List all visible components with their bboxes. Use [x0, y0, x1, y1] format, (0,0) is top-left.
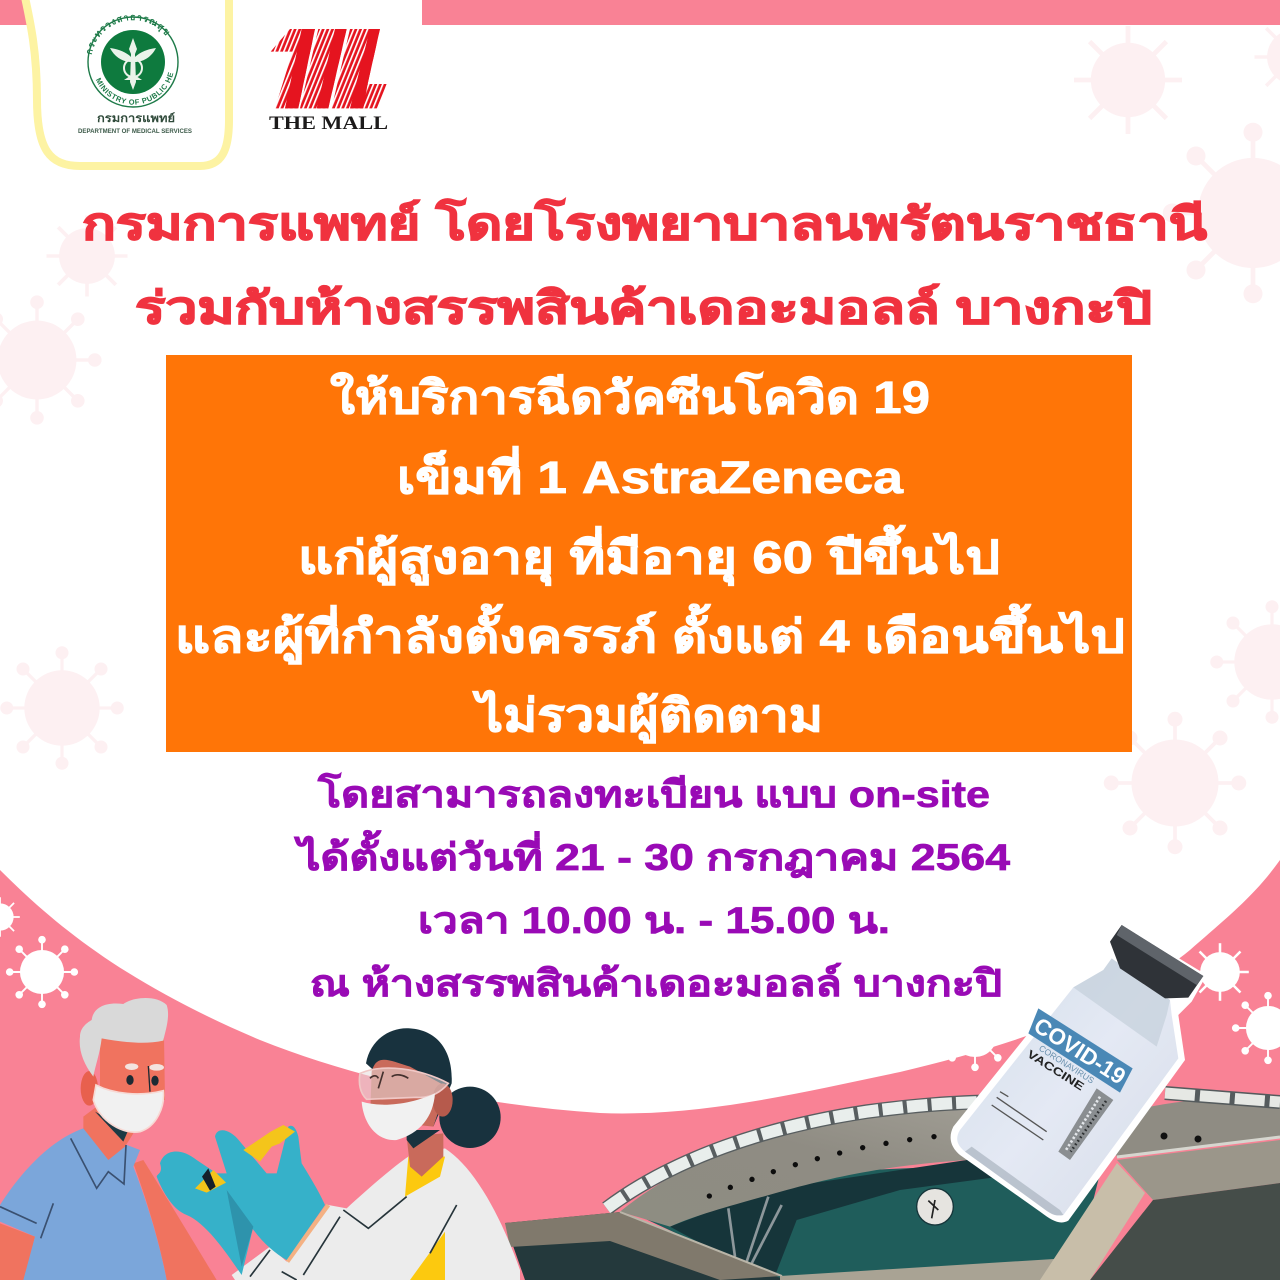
- fine print: [992, 1092, 1047, 1140]
- building: The Mall Bangkapi: [505, 1093, 1280, 1280]
- man: face: [100, 1037, 165, 1110]
- vial cap: [1110, 925, 1203, 998]
- glove shadow: [227, 1190, 253, 1267]
- syringe: [195, 1125, 295, 1193]
- vaccine vial: [951, 922, 1207, 1223]
- pink wave background: [0, 860, 1280, 1280]
- vial neck glass: [1073, 958, 1170, 1047]
- glass facade: [633, 1160, 1103, 1280]
- heading: ร่วมกับห้างสรรพสินค้าเดอะมอลล์ บางกะปิ: [135, 283, 1152, 333]
- man: neck: [83, 1107, 133, 1160]
- man: hair: [80, 998, 168, 1077]
- logo: Department of Medical Services: กรมการแพทย์: [97, 112, 175, 125]
- panel: orange announcement: แก่ผู้สูงอายุ ที่มีอายุ 60 ปีขึ้นไป: [298, 524, 1000, 586]
- right wall: [1100, 1099, 1280, 1157]
- elderly man: [0, 998, 217, 1280]
- QR code: [1058, 1088, 1113, 1160]
- wall portholes: [707, 1134, 937, 1199]
- man: beard: [95, 1112, 128, 1142]
- heading: กรมการแพทย์ โดยโรงพยาบาลนพรัตนราชธานี: [82, 197, 1207, 249]
- vial base glass: [965, 1147, 1063, 1215]
- registration details: ได้ตั้งแต่วันที่ 21 - 30 กรกฎาคม 2564: [293, 830, 1011, 878]
- clock: [917, 1188, 953, 1225]
- roof beam left: [505, 1212, 785, 1280]
- man: mask: [93, 1085, 164, 1132]
- nurse: cuff: [287, 1205, 328, 1262]
- panel: orange announcement: ให้บริการฉีดวัคซีนโควิด 19: [330, 371, 930, 423]
- nurse: neck: [407, 1133, 443, 1177]
- nurse: face: [370, 1060, 447, 1127]
- nurse: coat lines: [250, 1197, 457, 1280]
- illustration: elderly man and nurse: [0, 998, 520, 1280]
- registration details: โดยสามารถลงทะเบียน แบบ on-site: [317, 772, 990, 815]
- registration details: เวลา 10.00 น. - 15.00 น.: [418, 900, 890, 941]
- top pink bar: [0, 0, 1280, 25]
- window poles: [728, 1197, 782, 1263]
- nurse: hair: [366, 1028, 452, 1127]
- background pale virus pattern: [0, 16, 1280, 854]
- logo card: yellow rounded frame: [23, 0, 229, 166]
- heading: [82, 197, 1207, 333]
- label text: COVID-19: [1029, 1012, 1131, 1089]
- nurse: [157, 1028, 520, 1280]
- beige pillar: [1040, 1163, 1145, 1280]
- label text: VACCINE: [1025, 1048, 1086, 1094]
- logo: The Mall: [269, 29, 388, 134]
- dark interior: [1090, 1183, 1280, 1280]
- nurse: coat: [232, 1148, 520, 1280]
- man: eyes and brows: [125, 1063, 164, 1092]
- man: shirt: [0, 1128, 167, 1280]
- nurse: right glove: [215, 1126, 325, 1260]
- label text: CORONAVIRUS: [1037, 1043, 1096, 1086]
- panel: orange announcement: [166, 355, 1132, 752]
- white virus icons on wave: [0, 897, 1280, 1071]
- vial white outline: [951, 922, 1207, 1223]
- registration details: [293, 772, 1011, 1004]
- beige strip: [780, 1258, 1070, 1280]
- blue label band: [1028, 1008, 1133, 1093]
- panel: orange announcement: และผู้ที่กำลังตั้งครรภ์ ตั้งแต่ 4 เดือนขึ้นไป: [175, 603, 1125, 665]
- logo: The Mall: THE MALL: [269, 113, 388, 134]
- nurse: goggles: [359, 1068, 448, 1099]
- arch wall: [620, 1100, 1117, 1227]
- logo: Department of Medical Services: DEPARTMENT OF MEDICAL SERVICES: [78, 129, 192, 135]
- nurse: left glove: [157, 1152, 253, 1275]
- man: bare arms: [133, 1160, 217, 1280]
- arch rim slats: [607, 1101, 1000, 1208]
- registration details: ณ ห้างสรรพสินค้าเดอะมอลล์ บางกะปิ: [310, 963, 1002, 1004]
- panel: orange announcement: เข็มที่ 1 AstraZeneca: [397, 446, 904, 503]
- panel: orange announcement: ไม่รวมผู้ติดตาม: [472, 689, 823, 744]
- nurse: mask: [362, 1093, 435, 1140]
- dark window frames: [670, 1153, 1103, 1280]
- nurse: hair bun: [439, 1087, 501, 1148]
- nurse: eyes: [370, 1072, 408, 1088]
- logo: Department of Medical Services: กระทรวงสาธารณสุข: [87, 14, 170, 54]
- vial body and label: [957, 958, 1178, 1215]
- man: collar lines: [0, 1138, 126, 1238]
- nurse: yellow scrubs: [405, 1157, 445, 1197]
- logo: Department of Medical Services: [78, 14, 192, 135]
